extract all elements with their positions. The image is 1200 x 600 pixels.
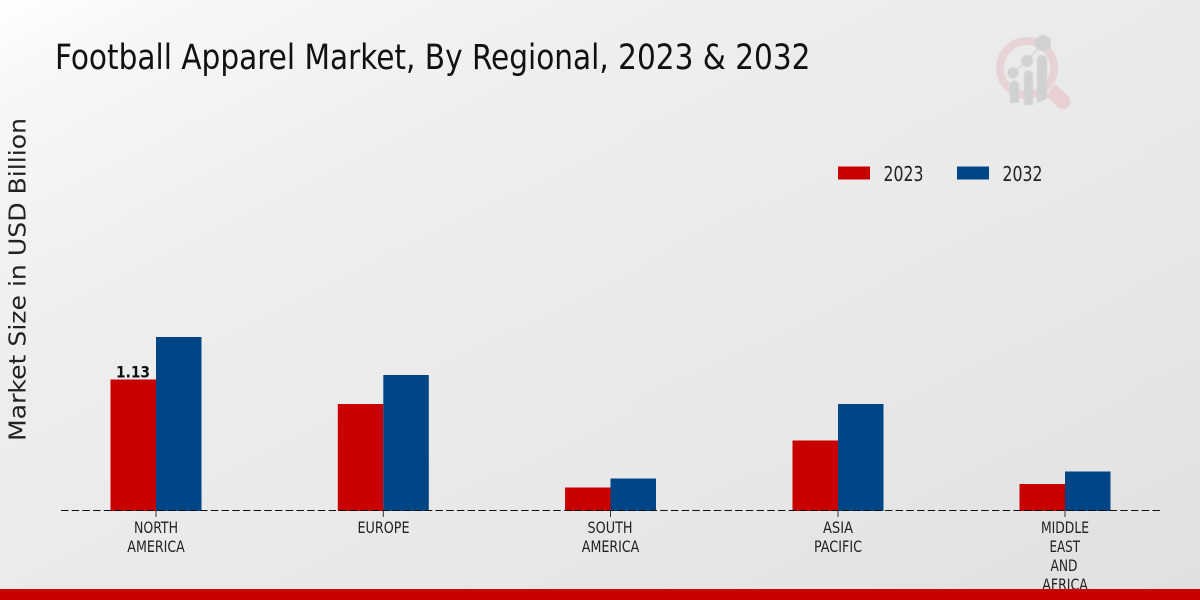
category label: South America: SOUTH bbox=[588, 518, 632, 537]
legend: 2032 bbox=[957, 162, 1042, 186]
category label: North America bbox=[127, 518, 185, 556]
legend: 2023: 2023 bbox=[884, 162, 924, 186]
category label: Europe: EUROPE bbox=[358, 518, 410, 537]
category label: Middle East and Africa: MIDDLE bbox=[1041, 518, 1089, 537]
bars: Europe bbox=[338, 375, 429, 511]
category label: North America: AMERICA bbox=[127, 537, 185, 556]
legend bbox=[838, 162, 1042, 186]
bars: Asia Pacific bbox=[792, 404, 884, 511]
bars: Middle East and Africa bbox=[1020, 472, 1110, 511]
icon: magnifier logo watermark bbox=[1000, 35, 1070, 109]
footer bar bbox=[0, 589, 1200, 600]
category label: Middle East and Africa: AND bbox=[1050, 556, 1078, 575]
bars: North America bbox=[110, 337, 202, 511]
category label: Middle East and Africa: EAST bbox=[1050, 537, 1080, 556]
bars: South America bbox=[565, 478, 656, 511]
category label: South America: AMERICA bbox=[582, 537, 639, 556]
category label: South America bbox=[582, 518, 639, 556]
category label: Middle East and Africa bbox=[1041, 518, 1089, 594]
category label: Asia Pacific: ASIA bbox=[823, 518, 853, 537]
legend: 2032: 2032 bbox=[1002, 162, 1042, 186]
legend: 2023 bbox=[838, 162, 924, 186]
category label: Asia Pacific bbox=[814, 518, 862, 556]
y-axis label: Market Size in USD Billion bbox=[4, 118, 32, 441]
category label: North America: NORTH bbox=[134, 518, 178, 537]
title: Football Apparel Market, By Regional, 2023 & 2032 bbox=[55, 38, 810, 78]
category label: Middle East and Africa: AFRICA bbox=[1042, 575, 1088, 594]
data label: 1.13 bbox=[116, 362, 150, 382]
bar chart bbox=[61, 337, 1160, 517]
category label: Asia Pacific: PACIFIC bbox=[814, 537, 862, 556]
